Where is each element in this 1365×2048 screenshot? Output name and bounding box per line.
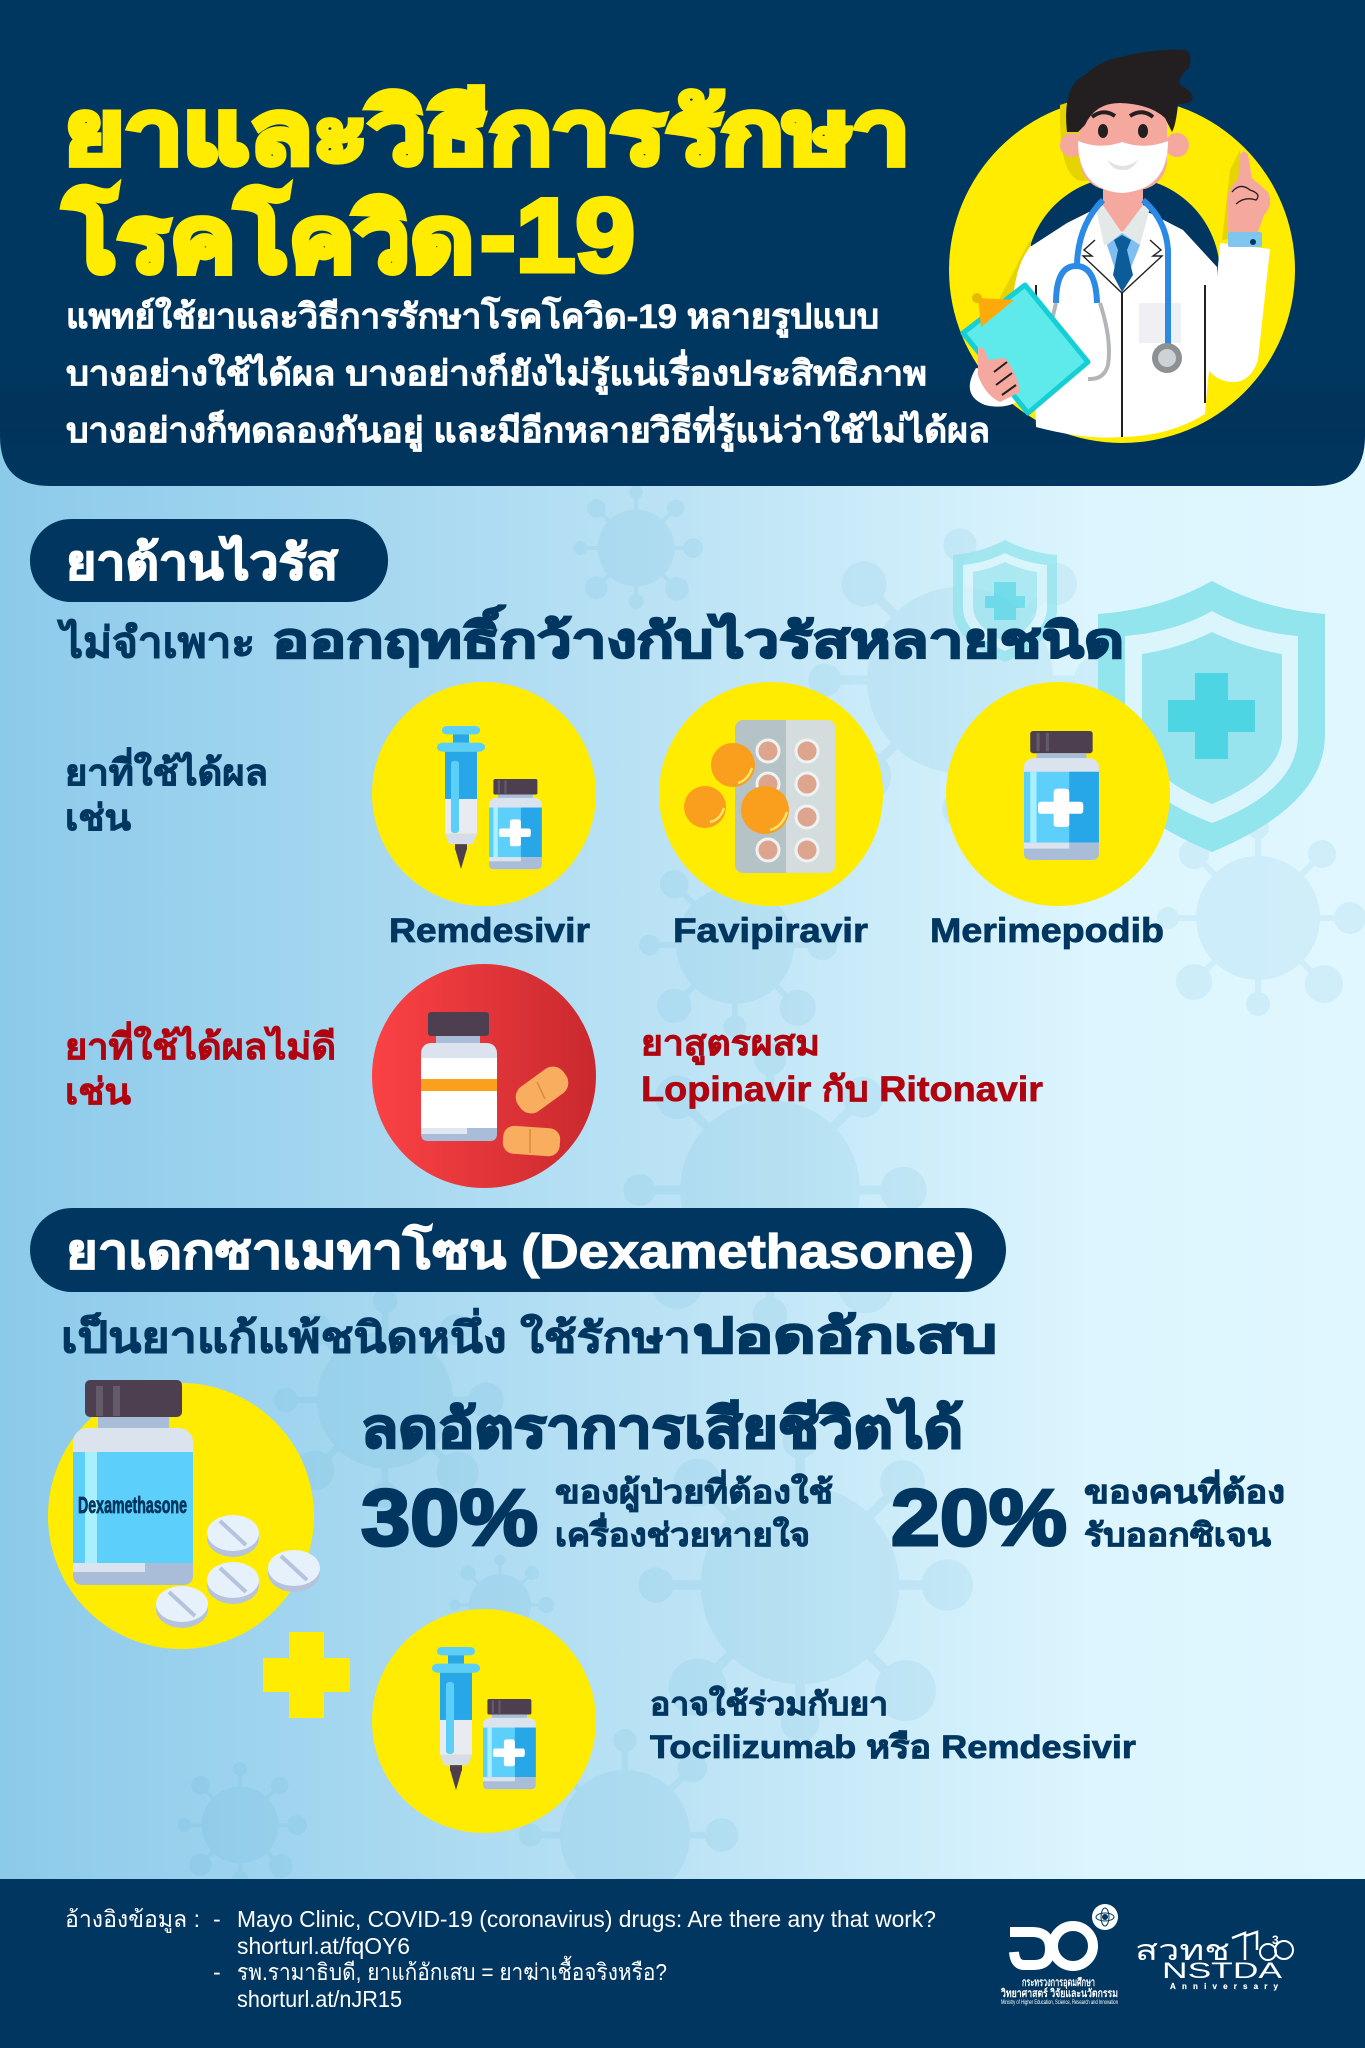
section heading pill: antiviral bbox=[30, 519, 388, 602]
illustration: doctor bbox=[949, 50, 1295, 443]
label: ineffective drugs: ยาที่ใช้ได้ผลไม่ดี bbox=[65, 1021, 336, 1067]
intro text bbox=[66, 296, 990, 452]
drug: Favipiravir bbox=[659, 682, 883, 950]
mask bbox=[1078, 141, 1168, 193]
label: effective drugs: เช่น bbox=[65, 797, 131, 838]
label: effective drugs: ยาที่ใช้ได้ผล bbox=[65, 747, 268, 793]
icon: dexamethasone bottle and tablets bbox=[48, 1380, 320, 1649]
text: combination therapy: อาจใช้ร่วมกับยา bbox=[650, 1685, 888, 1722]
blister pack bbox=[735, 720, 835, 873]
drug: Merimepodib: Merimepodib bbox=[930, 912, 1164, 950]
logo: ministry 60: วิทยาศาสตร์ วิจัยและนวัตกรรม bbox=[1000, 1987, 1118, 2000]
intro text: แพทย์ใช้ยาและวิธีการรักษาโรคโควิด-19 หลายรูปแบบ bbox=[66, 296, 879, 338]
background virus pattern bbox=[177, 485, 1365, 1938]
left cuff bbox=[970, 368, 1020, 407]
logo: NSTDA: 3 bbox=[1272, 1933, 1279, 1947]
text: combination therapy bbox=[650, 1685, 1136, 1765]
stat: 20%: รับออกซิเจน bbox=[1084, 1517, 1271, 1553]
tablets bbox=[156, 1515, 320, 1628]
icon: red drug bottle with tablets bbox=[372, 964, 596, 1188]
logo: ministry 60: Ministry of Higher Education, Science, Research and Innovation bbox=[1001, 2000, 1118, 2006]
drug: Remdesivir bbox=[372, 682, 596, 950]
section heading pill: dexamethasone bbox=[30, 1208, 1006, 1292]
clipboard bbox=[963, 285, 1088, 413]
bottle label text: Dexamethasone bbox=[78, 1492, 187, 1518]
text: combination drug: ยาสูตรผสม bbox=[641, 1024, 820, 1065]
section heading pill: antiviral: ยาต้านไวรัส bbox=[66, 534, 339, 590]
raised hand bbox=[1228, 152, 1270, 232]
hair bbox=[1066, 50, 1192, 132]
subheading: anti-allergy for pneumonia: เป็นยาแก้แพ้ชนิดหนึ่ง ใช้รักษา bbox=[61, 1308, 691, 1361]
panel: header bbox=[0, 0, 1365, 486]
label: ineffective drugs bbox=[65, 1021, 336, 1112]
left hand bbox=[978, 348, 1020, 402]
references: รพ.รามาธิบดี, ยาแก้อักเสบ = ยาฆ่าเชื้อจริงหรือ? bbox=[237, 1956, 667, 1985]
intro text: บางอย่างก็ทดลองกันอยู่ และมีอีกหลายวิธีที่รู้แน่ว่าใช้ไม่ได้ผล bbox=[66, 406, 990, 452]
text: combination drug: Lopinavir กับ Ritonavir bbox=[641, 1070, 1043, 1109]
icon: large shield bbox=[1098, 581, 1325, 852]
references: shorturl.at/fqOY6 bbox=[237, 1933, 410, 1959]
face bbox=[1080, 95, 1167, 190]
coat bbox=[1012, 210, 1218, 438]
references: - bbox=[213, 1906, 221, 1932]
label: ineffective drugs: เช่น bbox=[65, 1071, 131, 1112]
stat: 20%: 20% bbox=[891, 1473, 1067, 1562]
ears bbox=[1060, 133, 1084, 157]
title: โรคโควิด bbox=[63, 186, 474, 291]
stat: 30%: ของผู้ป่วยที่ต้องใช้ bbox=[555, 1469, 833, 1513]
intro text: บางอย่างใช้ได้ผล บางอย่างก็ยังไม่รู้แน่เรื่องประสิทธิภาพ bbox=[66, 349, 927, 395]
references: อ้างอิงข้อมูล : bbox=[65, 1906, 200, 1933]
pocket bbox=[1139, 303, 1181, 343]
logo: ministry 60: กระทรวงการอุดมศึกษา bbox=[1022, 1976, 1095, 1990]
right arm bbox=[1207, 243, 1270, 382]
stat: 30%: 30% bbox=[361, 1473, 538, 1562]
references: shorturl.at/nJR15 bbox=[237, 1986, 402, 2012]
label: effective drugs bbox=[65, 747, 268, 838]
drug: Remdesivir: Remdesivir bbox=[389, 912, 590, 950]
drug: Merimepodib bbox=[930, 682, 1170, 950]
stat: 20% bbox=[891, 1469, 1285, 1562]
eyes and brows bbox=[1098, 124, 1108, 138]
subheading: broad spectrum: ไม่จำเพาะ bbox=[57, 618, 255, 666]
drug: Favipiravir: Favipiravir bbox=[673, 912, 868, 950]
section heading pill: dexamethasone: ยาเดกซาเมทาโซน (Dexamethasone) bbox=[66, 1223, 974, 1279]
orange tablets bbox=[684, 743, 789, 834]
logo: NSTDA: สวทช bbox=[1135, 1935, 1230, 1967]
logo: NSTDA bbox=[1135, 1932, 1293, 1991]
panel: footer bbox=[0, 1879, 1365, 2048]
logo: NSTDA: NSTDA bbox=[1162, 1958, 1283, 1983]
text: combination therapy: Tocilizumab หรือ Remdesivir bbox=[650, 1729, 1136, 1765]
title: -19 bbox=[480, 178, 635, 294]
stethoscope bbox=[1077, 200, 1103, 265]
stat: 30%: เครื่องช่วยหายใจ bbox=[555, 1512, 810, 1553]
references: Mayo Clinic, COVID-19 (coronavirus) drugs: Are there any that work? bbox=[237, 1906, 936, 1932]
icon: yellow plus bbox=[263, 1632, 350, 1718]
title bbox=[63, 83, 910, 294]
icon: syringe and vial bbox=[372, 1609, 596, 1833]
subheading: broad spectrum: ออกฤทธิ์กว้างกับไวรัสหลายชนิด bbox=[272, 605, 1124, 668]
stat: 20%: ของคนที่ต้อง bbox=[1084, 1469, 1285, 1510]
references: - bbox=[213, 1959, 221, 1985]
subheading: broad spectrum bbox=[57, 605, 1124, 668]
stat: 30% bbox=[361, 1469, 833, 1562]
icon: small shield bbox=[953, 540, 1057, 662]
references bbox=[65, 1906, 936, 2012]
stat heading: ลดอัตราการเสียชีวิตได้ bbox=[361, 1397, 963, 1459]
title: ยาและวิธีการรักษา bbox=[64, 83, 910, 182]
subheading: anti-allergy for pneumonia bbox=[61, 1308, 997, 1363]
logo: NSTDA: Anniversary bbox=[1170, 1982, 1279, 1991]
subheading: anti-allergy for pneumonia: ปอดอักเสบ bbox=[693, 1310, 997, 1363]
text: combination drug bbox=[641, 1024, 1043, 1109]
neck and collar bbox=[1103, 187, 1143, 232]
logo: ministry 60 bbox=[1000, 1904, 1118, 2006]
